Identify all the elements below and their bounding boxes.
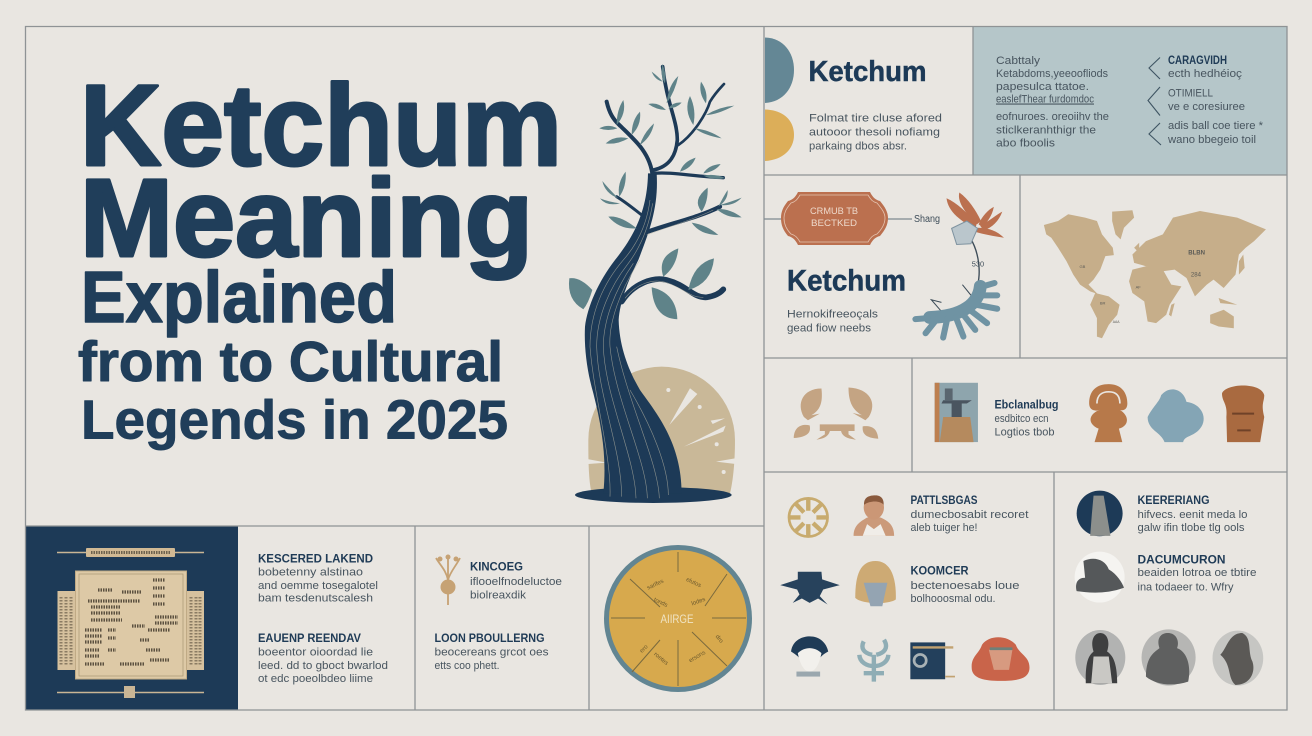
panel: legends right: galw ifin tlobe tlg ools: [1138, 522, 1245, 534]
text block: Loon Pboullerng: etts coo phett.: [434, 660, 500, 672]
panel: origin diagram: gead fiow neebs: [787, 322, 872, 334]
panel text: slate panel right column with chevrons: OTIMIELL: [1168, 88, 1213, 100]
text block: Loon Pboullerng: beocereans grcot oes: [434, 646, 549, 658]
panel: legends left: bectenoesabs loue: [910, 580, 1020, 592]
text block: Hernokifreeoçals: [787, 308, 879, 320]
text block: Pattlsbgas: PATTLSBGAS: [910, 495, 978, 507]
wheel segment labels: ero: [639, 644, 650, 654]
half sun: [588, 367, 735, 493]
panel: Ketchum intro: autooor thesoli nofiamg: [809, 126, 940, 138]
ground shadow: [575, 487, 732, 503]
icon: slate circle: [765, 38, 794, 103]
text block: Loon Pboullerng: LOON PBOULLERNG: [434, 633, 545, 645]
illustration: manuscript scroll: [57, 548, 204, 698]
panel: origin diagram: Shang: [914, 214, 940, 225]
text block: Eauenp Reendav: EAUENP REENDAV: [258, 633, 361, 645]
world map: [1044, 210, 1266, 338]
icon: gold wheel: [789, 498, 828, 537]
text block: Kescered Lakend: KESCERED LAKEND: [258, 554, 373, 566]
chart: gold segmented wheel: AIIRGE: [660, 612, 694, 626]
icon: paired bird ornament: [794, 387, 878, 440]
panel text: slate panel right column with chevrons: CARAGVIDH: [1168, 55, 1227, 67]
panel text: slate panel right column with chevrons: wano bbegeio toil: [1167, 134, 1256, 146]
title: Legends in 2025: [81, 388, 508, 450]
text block: Kincoeg: KINCOEG: [470, 562, 523, 574]
text block: Eauenp Reendav: ot edc poeolbdeo liime: [258, 673, 373, 685]
image: carved pillar: [935, 383, 978, 442]
world map: BLBN: [1188, 251, 1205, 256]
wheel segment labels: elutos: [685, 577, 702, 589]
panel: Ketchum intro: parkaing dbos absr.: [809, 140, 907, 152]
panel: origin diagram: [57, 192, 1266, 698]
panel text: slate panel right column with chevrons: ecth hedhéioç: [1168, 68, 1243, 80]
text block: Kescered Lakend: bam tesdenutscalesh: [258, 592, 373, 604]
panel text: slate panel right column with chevrons: [1148, 55, 1264, 146]
panel: origin diagram: BECTKED: [811, 218, 857, 229]
icon: navy mask: [780, 572, 840, 605]
panel text: slate panel left column: eofnuroes. oreoiihv the: [996, 111, 1109, 123]
text block: artifact caption: Ebclanalbug: [994, 400, 1058, 412]
text block: Kescered Lakend: [258, 554, 378, 604]
badge: [781, 192, 888, 245]
icon: navy hat figure: [791, 636, 828, 663]
panel: legends left: bolhooosmal odu.: [910, 593, 996, 605]
title: Meaning: [80, 157, 533, 280]
icon: red head: [972, 637, 1029, 681]
panel: legends right: hifvecs. eenit meda lo: [1138, 509, 1248, 521]
text block: Eauenp Reendav: leed. dd to gboct bwarlod: [258, 660, 388, 672]
panel text: slate panel left column: abo fboolis: [996, 138, 1056, 150]
panel: origin diagram: CRMUB TB: [810, 206, 858, 217]
icon: tan hair figure: [855, 561, 896, 603]
heading: Ketchum: [787, 264, 906, 298]
text block: Kincoeg: [470, 562, 562, 602]
bark lines: [590, 200, 713, 498]
text block: artifact caption: esdbitco ecn: [994, 413, 1048, 425]
wheel segment labels: roetes: [652, 652, 669, 667]
panel text: slate panel left column: easlefThear furdomdoc: [996, 94, 1094, 106]
panel: slate explanation panel: [973, 26, 1287, 175]
panel: legends left: dumecbosabit recoret: [910, 509, 1028, 521]
panel text: slate panel left column: [996, 55, 1109, 150]
icons: artifact row: [794, 383, 1264, 442]
world map: AAA: [1113, 320, 1120, 324]
wheel segment labels: lodes: [691, 597, 706, 607]
trunk: [585, 173, 682, 493]
panel text: slate panel right column with chevrons: ve e coresiuree: [1168, 101, 1245, 113]
panel text: slate panel right column with chevrons: adis ball coe tiere *: [1168, 120, 1264, 132]
icon: copper figure: [1089, 384, 1127, 442]
wheel segment labels: [639, 577, 724, 667]
small label: [912, 210, 941, 224]
text block: Folmat tire cluse afored: [809, 112, 942, 124]
world map: 284: [1191, 272, 1202, 278]
text block: Kescered Lakend: and oemme tosegalotel: [258, 580, 378, 592]
panel: navy manuscript panel: [26, 526, 238, 710]
text block: Loon Pboullerng: [434, 633, 549, 672]
text block: Kescered Lakend: bobetenny alstinao: [258, 566, 363, 578]
panel: legends left: [780, 495, 1029, 682]
icon: boy portrait: [854, 517, 894, 536]
title: Ketchum: [80, 62, 562, 190]
icon: coral and slate arc: 530: [972, 260, 984, 269]
branches: [607, 67, 724, 302]
panel: Ketchum intro: [765, 38, 942, 161]
panel text: slate panel left column: Ketabdoms,yeeoofliods: [996, 68, 1108, 80]
icon: coral and slate arc: [915, 193, 1004, 338]
illustration: tree with half sun: [569, 64, 742, 503]
text block: artifact caption: Logtios tbob: [994, 426, 1054, 438]
title: from to Cultural: [78, 330, 503, 394]
portrait: seated figure: [1142, 629, 1196, 686]
title: [78, 62, 562, 450]
icon: navy book: [910, 642, 945, 679]
text block: artifact caption: [994, 400, 1058, 438]
world map: AF: [1136, 285, 1141, 290]
chart: gold segmented wheel: [606, 548, 750, 690]
portrait: navy circle: [1077, 491, 1123, 536]
panel: legends right: beaiden lotroa oe tbtire: [1138, 567, 1256, 579]
world map: BR: [1100, 301, 1106, 306]
portrait: woman: [1075, 630, 1125, 685]
icon: root plant: [436, 554, 460, 605]
wheel segment labels: tonds: [652, 597, 668, 609]
text block: Kincoeg: iflooelfnodeluctoe: [470, 576, 562, 588]
panel: legends right: ina todaeer to. Wfry: [1138, 582, 1234, 594]
icon: brown head: [1222, 386, 1264, 442]
panel: legends left: aleb tuiger he!: [910, 522, 978, 534]
world map: GB: [1079, 264, 1086, 269]
heading: Ketchum: [808, 56, 926, 88]
icon: blue symbol: [859, 640, 888, 682]
panel text: slate panel left column: Cabttaly: [996, 55, 1041, 67]
text block: Eauenp Reendav: boeentor oioordad lie: [258, 646, 373, 658]
wheel segment labels: ersons: [688, 650, 707, 664]
portrait: creature: [1213, 631, 1263, 686]
panel text: slate panel left column: sticlkeranhthigr the: [996, 124, 1096, 136]
text block: Koomcer: KOOMCER: [910, 566, 969, 578]
panel: legends right: [1075, 491, 1263, 686]
text block: Eauenp Reendav: [258, 633, 388, 685]
icon: blue stone: [1148, 389, 1204, 442]
panel text: slate panel left column: papesulca ttatoe.: [996, 81, 1089, 93]
wheel segment labels: dro: [714, 634, 724, 645]
portrait: white circle landscape: [1075, 552, 1125, 603]
text block: Keerering: KEERERIANG: [1138, 495, 1210, 507]
leaves: [569, 64, 742, 319]
icon: gold circle: [765, 110, 794, 161]
text block: Dacumcuron: DACUMCURON: [1138, 554, 1226, 566]
title: Explained: [81, 258, 397, 338]
wheel segment labels: sarifes: [646, 579, 665, 592]
text block: Kincoeg: biolreaxdik: [470, 590, 527, 602]
